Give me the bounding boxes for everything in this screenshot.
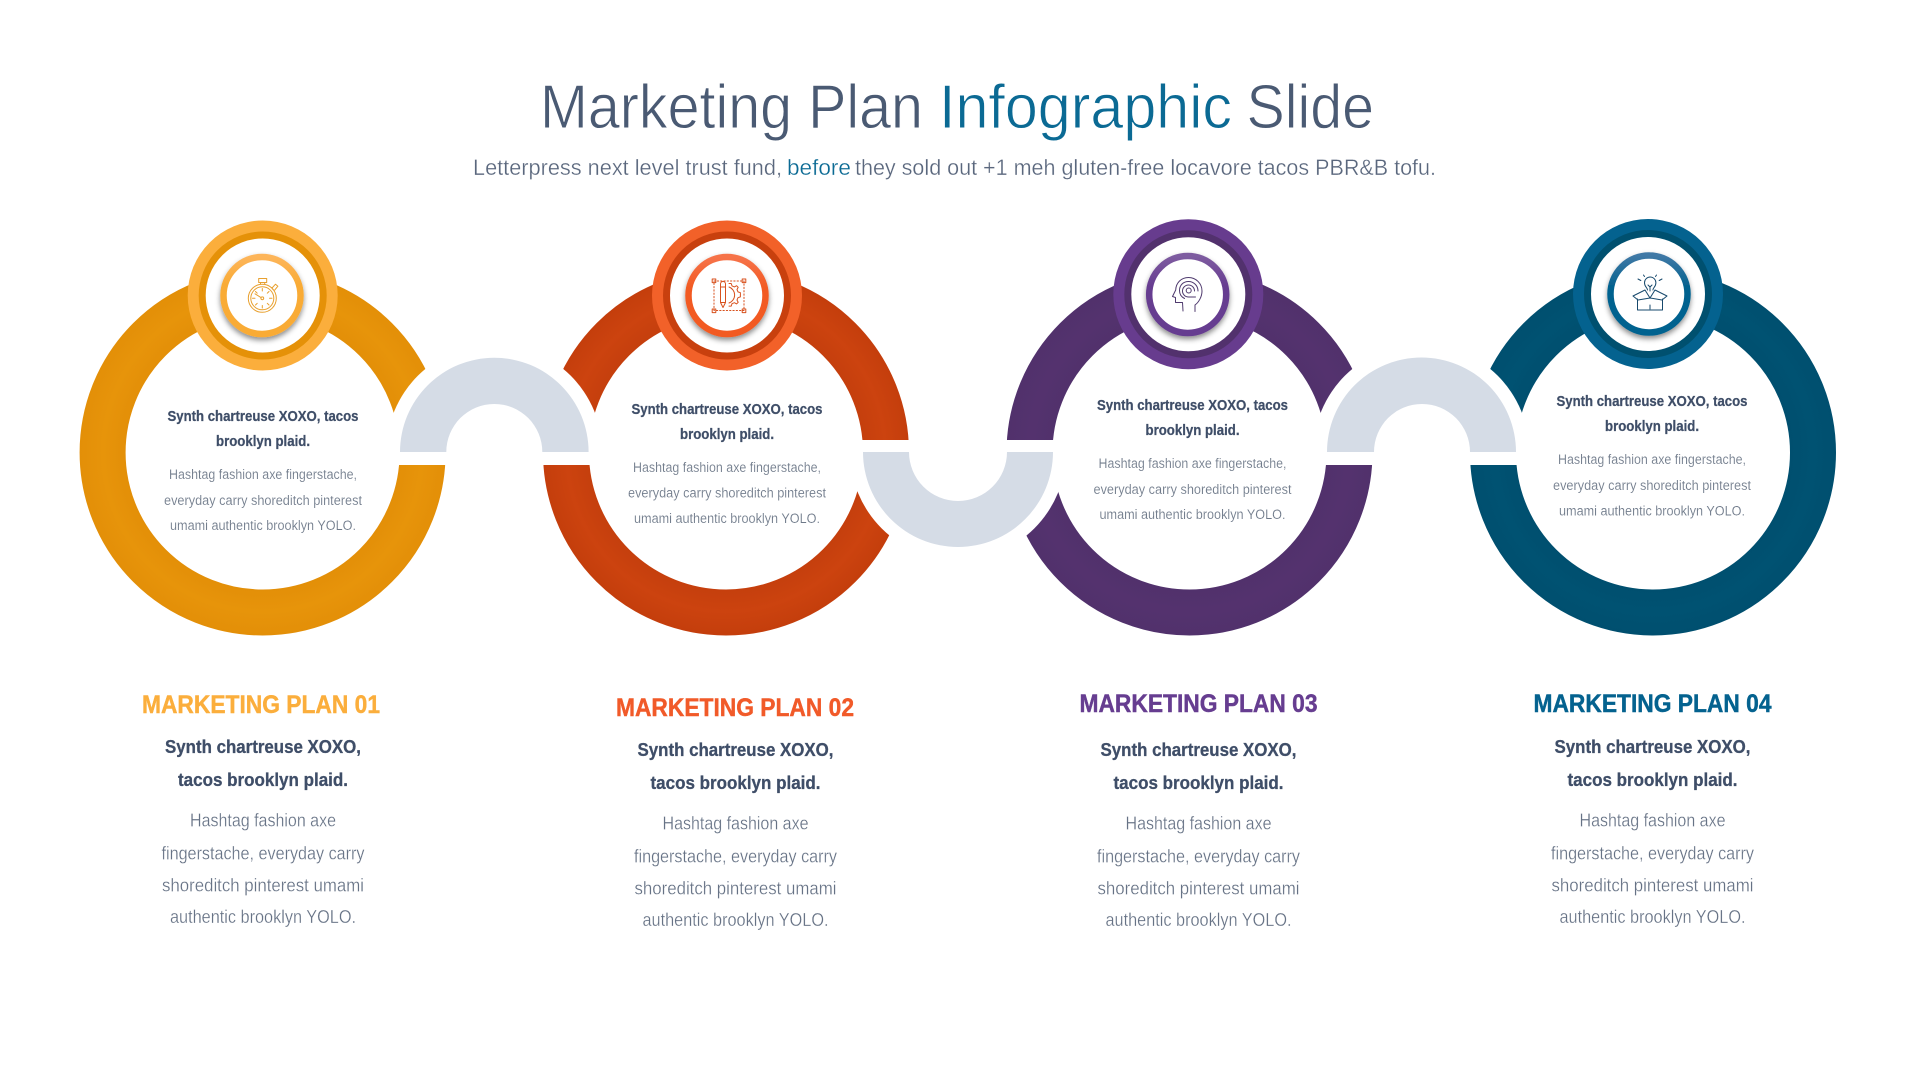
- plan 3 text: Synth chartreuse XOXO,: [1100, 739, 1296, 760]
- plan 4 text: Synth chartreuse XOXO,: [1554, 736, 1750, 757]
- ring text 2: umami authentic brooklyn YOLO.: [634, 511, 820, 526]
- plan 2 text: shoreditch pinterest umami: [634, 878, 836, 898]
- icon: head maze: [1172, 278, 1202, 312]
- subtitle: [473, 155, 1436, 180]
- plan 3 text: fingerstache, everyday carry: [1097, 846, 1300, 866]
- ring 4: [1493, 292, 1813, 612]
- title: Infographic: [939, 73, 1232, 142]
- subtitle: before: [787, 155, 851, 180]
- icon: stopwatch: [248, 278, 278, 312]
- plan 1 text: Hashtag fashion axe: [190, 810, 336, 830]
- plan 2 text: authentic brooklyn YOLO.: [642, 910, 828, 930]
- badge 3: [1113, 219, 1263, 369]
- ring text 1: everyday carry shoreditch pinterest: [164, 493, 362, 508]
- plan 3 text: [1080, 690, 1318, 930]
- plan 4 text: tacos brooklyn plaid.: [1568, 769, 1738, 790]
- plan 3 text: shoreditch pinterest umami: [1098, 878, 1300, 898]
- ring text 2: brooklyn plaid.: [680, 427, 774, 443]
- connector arch 1: [400, 358, 589, 452]
- connector arch 2: [1327, 358, 1516, 452]
- plan 1 text: [142, 691, 380, 927]
- plan 4 text: MARKETING PLAN 04: [1534, 690, 1772, 718]
- ring 2: [566, 292, 886, 612]
- plan 1 text: MARKETING PLAN 01: [142, 691, 380, 719]
- plan 3 text: MARKETING PLAN 03: [1080, 690, 1318, 718]
- plan 4 text: Hashtag fashion axe: [1580, 810, 1726, 830]
- plan 2 text: [616, 694, 854, 930]
- badge 2: [652, 220, 802, 370]
- ring text 3: [1094, 398, 1292, 522]
- ring text 2: Synth chartreuse XOXO, tacos: [632, 402, 822, 418]
- plan 4 text: shoreditch pinterest umami: [1552, 876, 1754, 896]
- ring text 4: brooklyn plaid.: [1605, 419, 1699, 435]
- icon: idea box: [1633, 275, 1667, 310]
- plan 2 text: fingerstache, everyday carry: [634, 846, 837, 866]
- plan 2 text: tacos brooklyn plaid.: [650, 772, 820, 793]
- ring text 1: umami authentic brooklyn YOLO.: [170, 518, 356, 533]
- ring 1: [103, 292, 423, 612]
- ring text 4: [1553, 394, 1751, 518]
- subtitle: they sold out +1 meh gluten-free locavore tacos PBR&B tofu.: [855, 155, 1436, 180]
- plan 2 text: Hashtag fashion axe: [662, 814, 808, 834]
- ring text 3: Hashtag fashion axe fingerstache,: [1098, 456, 1286, 471]
- ring text 2: [628, 402, 826, 526]
- connector u-bend: [863, 452, 1053, 547]
- badge 4: [1573, 219, 1723, 369]
- ring text 2: everyday carry shoreditch pinterest: [628, 486, 826, 500]
- ring text 1: brooklyn plaid.: [216, 434, 310, 450]
- ring text 4: Hashtag fashion axe fingerstache,: [1558, 452, 1746, 467]
- title: Marketing Plan: [540, 73, 923, 142]
- title: [540, 73, 1374, 142]
- plan 4 text: [1534, 690, 1772, 927]
- plan 3 text: Hashtag fashion axe: [1126, 814, 1272, 834]
- plan 1 text: shoreditch pinterest umami: [162, 876, 364, 896]
- plan 3 text: authentic brooklyn YOLO.: [1106, 910, 1292, 930]
- title: Slide: [1246, 73, 1374, 142]
- ring text 3: everyday carry shoreditch pinterest: [1094, 482, 1292, 497]
- ring text 4: everyday carry shoreditch pinterest: [1553, 478, 1751, 493]
- plan 4 text: fingerstache, everyday carry: [1551, 844, 1754, 864]
- plan 3 text: tacos brooklyn plaid.: [1114, 772, 1284, 793]
- plan 2 text: MARKETING PLAN 02: [616, 694, 854, 722]
- ring text 1: Synth chartreuse XOXO, tacos: [168, 409, 358, 425]
- icon: design tool: [712, 279, 746, 313]
- plan 4 text: authentic brooklyn YOLO.: [1560, 907, 1746, 927]
- badge 1: [188, 220, 338, 370]
- plan 1 text: authentic brooklyn YOLO.: [170, 907, 356, 927]
- ring text 4: umami authentic brooklyn YOLO.: [1559, 504, 1745, 518]
- ring chain: [103, 292, 1813, 612]
- ring text 3: umami authentic brooklyn YOLO.: [1100, 507, 1286, 522]
- plan 1 text: tacos brooklyn plaid.: [178, 769, 348, 790]
- ring text 3: Synth chartreuse XOXO, tacos: [1097, 398, 1288, 414]
- ring text 4: Synth chartreuse XOXO, tacos: [1556, 394, 1748, 410]
- ring text 1: Hashtag fashion axe fingerstache,: [169, 467, 357, 482]
- ring text 3: brooklyn plaid.: [1146, 423, 1240, 439]
- ring text 2: Hashtag fashion axe fingerstache,: [633, 460, 821, 475]
- plan 1 text: fingerstache, everyday carry: [162, 844, 364, 864]
- ring 3: [1030, 292, 1350, 612]
- subtitle: Letterpress next level trust fund,: [473, 155, 782, 180]
- ring text 1: [164, 409, 362, 533]
- plan 1 text: Synth chartreuse XOXO,: [165, 736, 361, 757]
- plan 2 text: Synth chartreuse XOXO,: [638, 739, 834, 760]
